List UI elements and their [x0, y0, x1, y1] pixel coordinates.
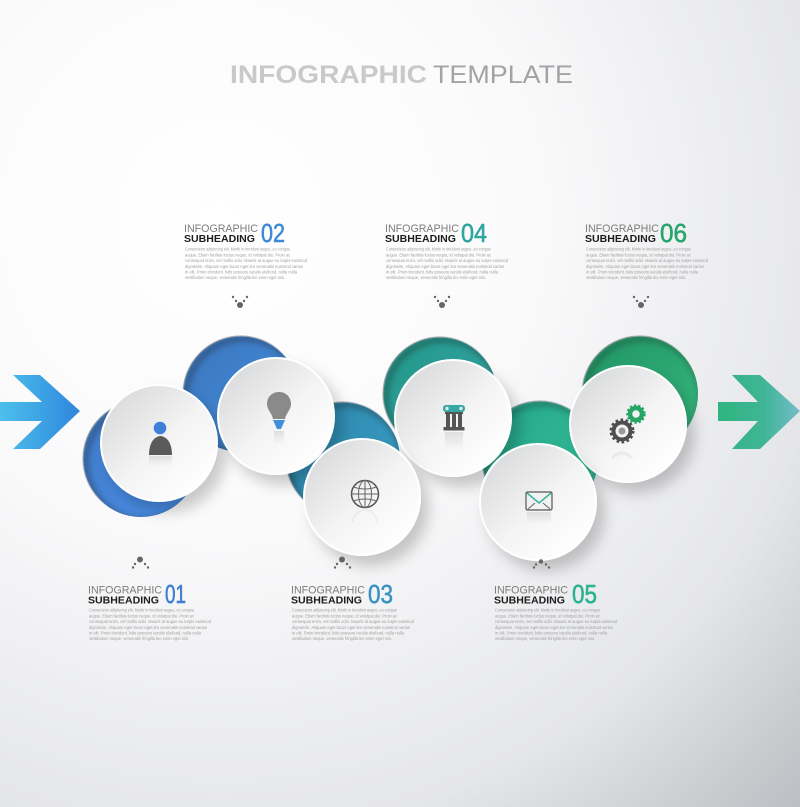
text block 01: INFOGRAPHIC — [88, 584, 162, 596]
icon: globe — [352, 480, 378, 522]
coloured circles — [83, 336, 701, 520]
white disc 05 — [480, 444, 596, 560]
text block 02: in elit. Proin tincidunt, felis posuere iaculis eleifend, nulla nulla — [185, 270, 297, 274]
text block 06: 06 — [660, 218, 687, 248]
text block 02: Consectetur adipiscing elit. Morbi in tincidunt augue, eu congue — [185, 247, 290, 252]
circle 02 back — [182, 335, 286, 450]
text block 05: SUBHEADING — [494, 594, 565, 606]
text block 05 — [494, 579, 617, 641]
dot marker 02 — [232, 296, 248, 308]
text block 04: dignissim. Aliquam eget lacus eget leo venenatis euismod varius — [386, 264, 505, 269]
icon: light bulb — [267, 392, 291, 444]
circle 05 back — [482, 400, 596, 482]
icon: envelope — [526, 492, 552, 524]
text block 05: augue. Etiam facilisis luctus neque, id volutpat dui. Proin ac — [495, 613, 601, 618]
icon: gears — [611, 406, 644, 458]
text block 06: consequat enim, vel mollis odio. Mauris at augue eu turpis euismod — [586, 258, 708, 263]
text block 01: Consectetur adipiscing elit. Morbi in tincidunt augue, eu congue — [89, 608, 194, 613]
text block 01: augue. Etiam facilisis luctus neque, id volutpat dui. Proin ac — [89, 613, 195, 618]
text block 01: consequat enim, vel mollis odio. Mauris at augue eu turpis euismod — [89, 619, 211, 624]
dot marker 03 — [334, 556, 351, 569]
text block 04: SUBHEADING — [385, 233, 456, 245]
dot marker 04 — [434, 296, 450, 308]
dot marker 06 — [633, 296, 649, 308]
circle 01 back — [82, 408, 186, 517]
text block 05: INFOGRAPHIC — [494, 584, 568, 596]
circle 03 back — [288, 401, 400, 500]
text block 04: INFOGRAPHIC — [385, 223, 459, 235]
title: INFOGRAPHIC — [230, 61, 427, 89]
text block 01: vestibulum neque, venenatis fringilla leo enim eget nisi. — [89, 636, 189, 641]
text block 01: SUBHEADING — [88, 594, 159, 606]
text block 04: augue. Etiam facilisis luctus neque, id volutpat dui. Proin ac — [386, 252, 492, 257]
text block 04: 04 — [461, 218, 487, 248]
text block 02: dignissim. Aliquam eget lacus eget leo venenatis euismod varius — [185, 264, 304, 269]
text block 02: SUBHEADING — [184, 233, 255, 245]
arrow: right — [718, 375, 800, 449]
icon: person — [149, 422, 172, 466]
text block 03: 03 — [368, 579, 393, 609]
white disc 04 — [395, 360, 511, 476]
text block 05: consequat enim, vel mollis odio. Mauris at augue eu turpis euismod — [495, 619, 617, 624]
text block 06: vestibulum neque, venenatis fringilla leo enim eget nisi. — [586, 275, 686, 280]
text block 04: consequat enim, vel mollis odio. Mauris at augue eu turpis euismod — [386, 258, 508, 263]
text block 06: INFOGRAPHIC — [585, 223, 659, 235]
text block 01: 01 — [165, 579, 186, 609]
text block 02: augue. Etiam facilisis luctus neque, id volutpat dui. Proin ac — [185, 252, 291, 257]
text block 05: 05 — [572, 579, 597, 609]
text block 03: INFOGRAPHIC — [291, 584, 365, 596]
text block 01: dignissim. Aliquam eget lacus eget leo venenatis euismod varius — [89, 625, 208, 630]
white disc 06 — [570, 366, 686, 482]
dot marker 05 — [533, 559, 550, 569]
text block 06: in elit. Proin tincidunt, felis posuere iaculis eleifend, nulla nulla — [586, 270, 698, 274]
text block 04: in elit. Proin tincidunt, felis posuere iaculis eleifend, nulla nulla — [386, 270, 498, 274]
text block 02 — [184, 218, 307, 280]
text block 03: SUBHEADING — [291, 594, 362, 606]
text block 03: consequat enim, vel mollis odio. Mauris at augue eu turpis euismod — [292, 619, 414, 624]
text block 02: 02 — [261, 218, 285, 248]
dot marker 01 — [132, 556, 149, 569]
text block 03: vestibulum neque, venenatis fringilla leo enim eget nisi. — [292, 636, 392, 641]
text block 02: vestibulum neque, venenatis fringilla leo enim eget nisi. — [185, 275, 285, 280]
text block 03: in elit. Proin tincidunt, felis posuere iaculis eleifend, nulla nulla — [292, 630, 404, 636]
text block 03 — [291, 579, 414, 641]
circle 06 back — [582, 335, 698, 428]
white disc 01 — [101, 385, 217, 501]
text block 06: SUBHEADING — [585, 233, 656, 245]
text block 06 — [585, 218, 708, 280]
text block 05: Consectetur adipiscing elit. Morbi in tincidunt augue, eu congue — [495, 608, 600, 613]
text block 04: vestibulum neque, venenatis fringilla leo enim eget nisi. — [386, 275, 486, 280]
text block 02: consequat enim, vel mollis odio. Mauris at augue eu turpis euismod — [185, 258, 307, 263]
text block 04: Consectetur adipiscing elit. Morbi in tincidunt augue, eu congue — [386, 247, 491, 252]
text block 03: augue. Etiam facilisis luctus neque, id volutpat dui. Proin ac — [292, 613, 398, 618]
title: TEMPLATE — [433, 61, 573, 89]
text block 01: in elit. Proin tincidunt, felis posuere iaculis eleifend, nulla nulla — [89, 630, 201, 636]
text block 03: dignissim. Aliquam eget lacus eget leo venenatis euismod varius — [292, 625, 411, 630]
text block 06: Consectetur adipiscing elit. Morbi in tincidunt augue, eu congue — [586, 247, 691, 252]
text block 01 — [88, 579, 211, 641]
white disc 03 — [304, 439, 420, 555]
text block 02: INFOGRAPHIC — [184, 223, 258, 235]
text block 06: dignissim. Aliquam eget lacus eget leo venenatis euismod varius — [586, 264, 705, 269]
text block 05: vestibulum neque, venenatis fringilla leo enim eget nisi. — [495, 636, 595, 641]
icon: column — [443, 405, 465, 450]
white disc 02 — [218, 358, 334, 474]
text block 06: augue. Etiam facilisis luctus neque, id volutpat dui. Proin ac — [586, 252, 692, 257]
text block 03: Consectetur adipiscing elit. Morbi in tincidunt augue, eu congue — [292, 608, 397, 613]
text block 04 — [385, 218, 508, 280]
arrow: left — [0, 375, 80, 449]
circle 04 back — [382, 336, 494, 430]
text block 05: dignissim. Aliquam eget lacus eget leo venenatis euismod varius — [495, 625, 614, 630]
text block 05: in elit. Proin tincidunt, felis posuere iaculis eleifend, nulla nulla — [495, 630, 607, 636]
title — [230, 61, 573, 89]
